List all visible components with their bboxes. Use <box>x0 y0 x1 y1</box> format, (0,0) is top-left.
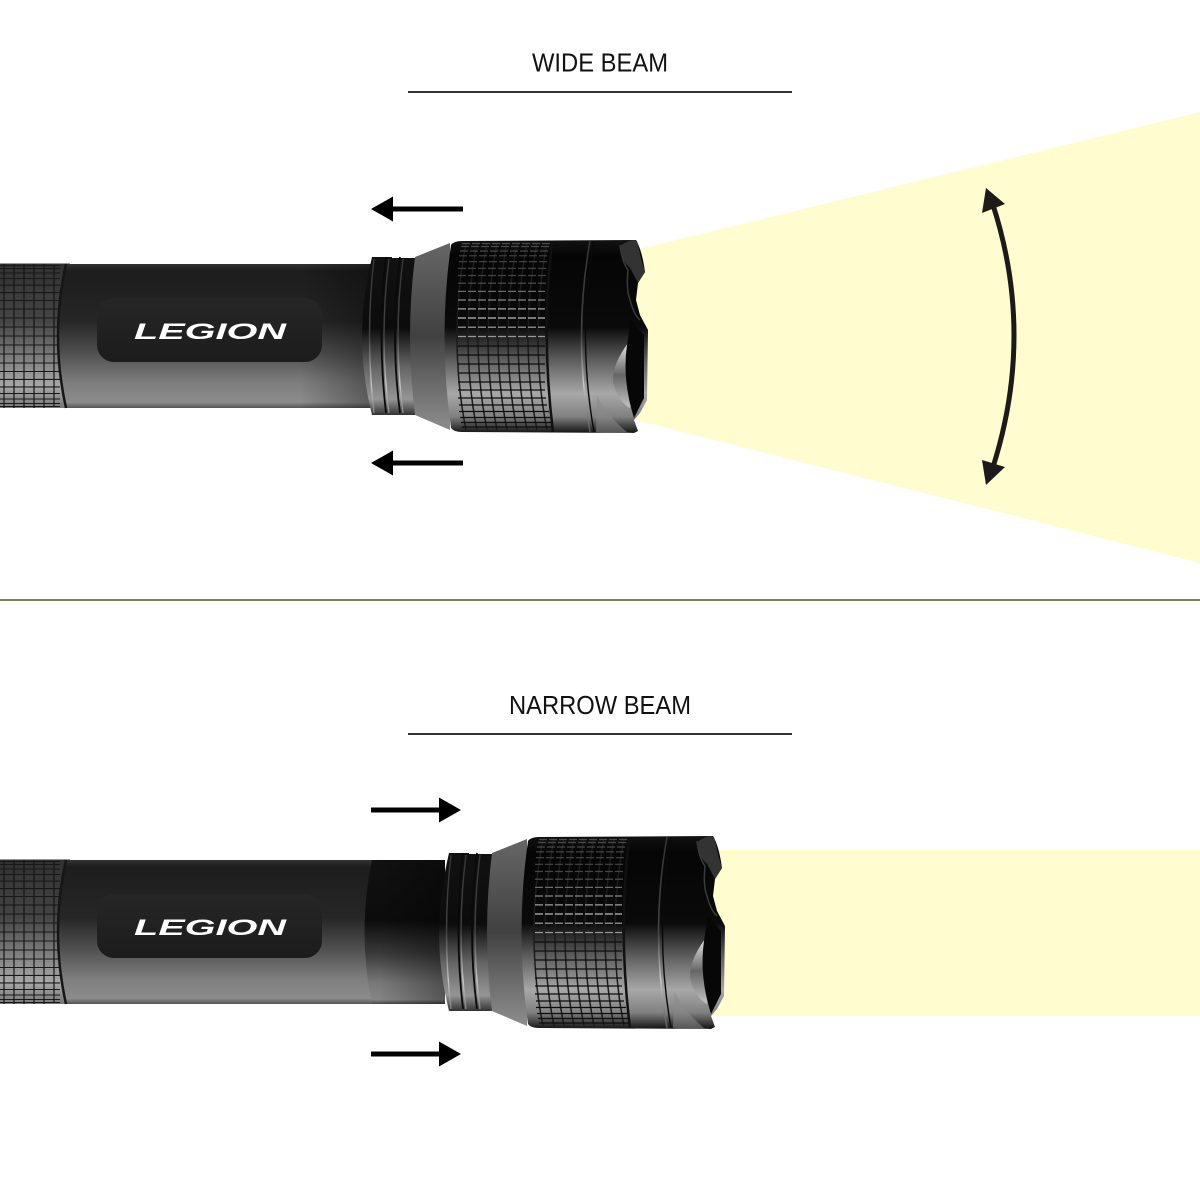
arrow: upper left <box>371 196 463 222</box>
flashlight: narrow beam position <box>0 836 725 1029</box>
logo badge: LEGION <box>134 319 288 344</box>
wide beam light cone <box>635 112 1200 563</box>
arrow: lower right <box>371 1042 461 1066</box>
title: wide beam: WIDE BEAM <box>532 48 668 78</box>
flashlight: wide beam position <box>0 240 648 433</box>
curved double arrow: beam spread <box>982 188 1014 485</box>
logo badge <box>97 298 322 362</box>
logo badge <box>97 894 322 958</box>
section divider <box>0 599 1200 601</box>
arrow: lower left <box>371 450 463 476</box>
title: narrow beam: NARROW BEAM <box>509 690 691 720</box>
arrow: upper right <box>371 798 461 822</box>
narrow beam light column <box>700 850 1200 1016</box>
logo badge: LEGION <box>134 915 288 940</box>
wide beam title rule <box>408 91 792 93</box>
narrow beam title rule <box>408 733 792 735</box>
